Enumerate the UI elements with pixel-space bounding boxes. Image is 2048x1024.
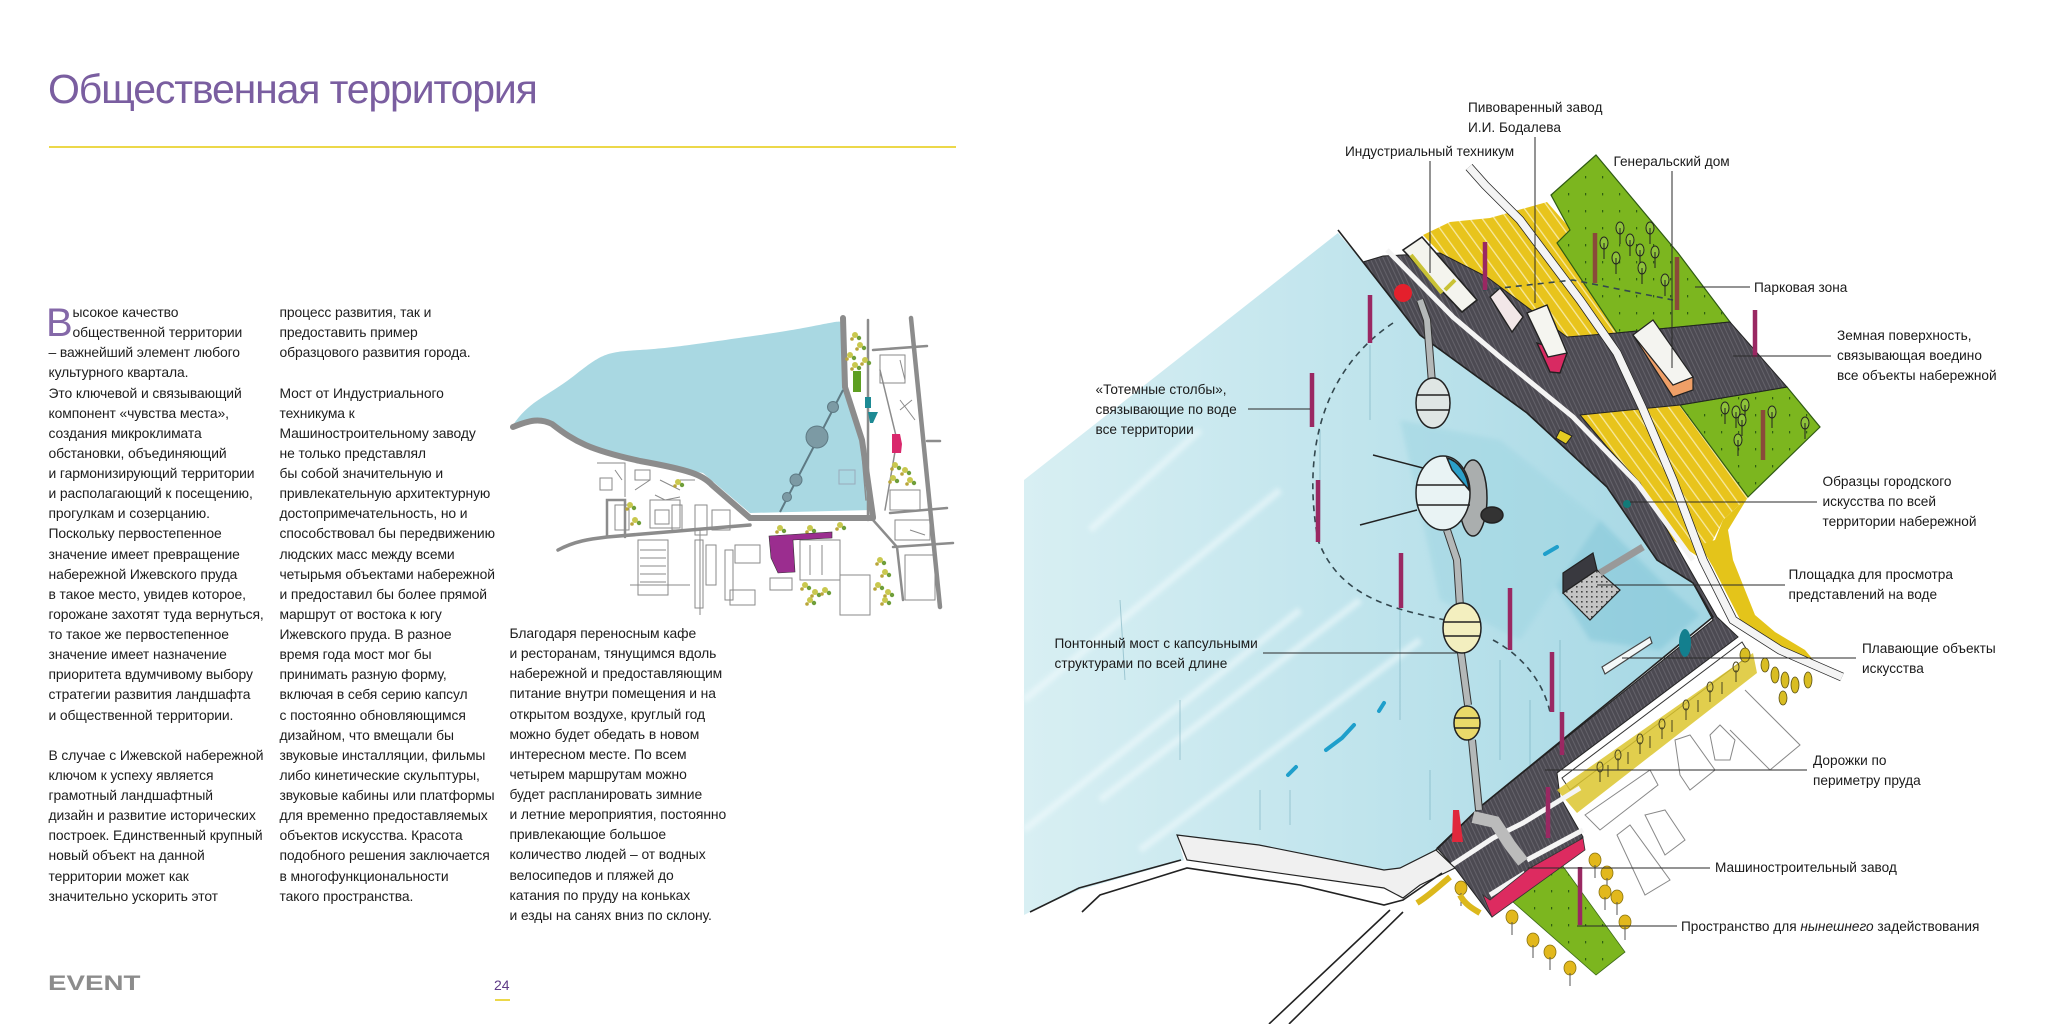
label: industrial college: Индустриальный техникум xyxy=(1345,144,1514,159)
sketch: capsule 1 xyxy=(1416,378,1450,428)
sketch: red dot xyxy=(1394,284,1412,302)
sketch: white embankment path xyxy=(1387,250,1693,560)
sketch: dark embankment surface xyxy=(1363,253,1787,917)
page number underline xyxy=(495,999,510,1001)
sketch: water streaks xyxy=(1024,345,1700,850)
logo EVENT: EVENT xyxy=(48,972,140,995)
label: pontoon bridge: структурами по всей длине xyxy=(1054,656,1227,671)
sketch: dashed route xyxy=(1313,280,1673,712)
label: urban art: Образцы городского xyxy=(1822,474,1952,489)
label: floating art: Плавающие объекты xyxy=(1862,641,1996,656)
sketch: pink factory bar xyxy=(1483,838,1585,917)
sketch: yellow trees south xyxy=(1455,853,1631,986)
plan: green strip xyxy=(853,371,861,392)
plan: roads xyxy=(513,318,953,607)
label: general house: Генеральский дом xyxy=(1614,154,1730,169)
plan: pond xyxy=(513,322,872,513)
label: current use space: Пространство для нынешнего задействования xyxy=(1681,919,1979,934)
label: brewery: И.И. Бодалева xyxy=(1468,120,1561,135)
text column 3: Благодаря переносным кафе и ресторанам, тянущимся вдоль набережной и предоставляющим питание внутри помещения и на открытом воздухе, круглый год можно будет обедать в новом интересном месте. По всем четырем маршрутам можно будет распланировать зимние и летние мероприятия, постоянно привлекающие большое количество людей – от водных велосипедов и пляжей до катания по пруду на коньках и езды на санях вниз по склону. xyxy=(510,625,726,923)
sketch: floating art xyxy=(1602,637,1652,674)
label: totem poles: «Тотемные столбы», xyxy=(1096,382,1227,397)
label: machine plant: Машиностроительный завод xyxy=(1715,860,1897,875)
sketch: building windows xyxy=(1411,255,1455,293)
label: perimeter paths: периметру пруда xyxy=(1813,773,1921,788)
plan: floating bridge xyxy=(780,390,855,512)
sketch: capsule 4 xyxy=(1454,706,1480,740)
sketch: yellow patch west xyxy=(1417,877,1480,913)
sketch: trees xyxy=(1600,222,1809,456)
text column 1: ысокое качество общественной территории – важнейший элемент любого культурного квартала. Это ключевой и связывающий компонент «чувства места», создания микроклимата обстановки, объединяющий и гармонизирующий территории и располагающий к посещению, прогулкам и созерцанию. Поскольку первостепенное значение имеет превращение набережной Ижевского пруда в такое место, увидев которое, горожане захотят туда вернуться, то такое же первостепенное значение имеет назначение приоритета вдумчивому выбору стратегии развития ландшафта и общественной территории. В случае с Ижевской набережной ключом к успеху является грамотный ландшафтный дизайн и развитие исторических построек. Единственный крупный новый объект на данной территории может как значительно ускорить этот xyxy=(48,304,264,904)
label: ground surface: все объекты набережной xyxy=(1837,368,1997,383)
plan: vegetation xyxy=(625,332,916,606)
label: ground surface: связывающая воедино xyxy=(1837,348,1982,363)
label: park zone: Парковая зона xyxy=(1754,280,1848,295)
label: urban art: территории набережной xyxy=(1822,514,1977,529)
label: ground surface: Земная поверхность, xyxy=(1837,328,1972,343)
sketch: poles xyxy=(1312,233,1763,925)
title underline xyxy=(49,146,956,148)
sketch: brewery buildings xyxy=(1490,288,1567,373)
label: viewing platform: представлений на воде xyxy=(1788,587,1937,602)
sketch: lower yellow strip xyxy=(1557,653,1757,813)
sketch: teal dot xyxy=(1623,500,1631,508)
sketch: red marker xyxy=(1452,810,1463,842)
main axonometric sketch xyxy=(1024,100,1997,1024)
label: pontoon bridge: Понтонный мост с капсульными xyxy=(1054,636,1258,651)
label: totem poles: связывающие по воде xyxy=(1096,402,1237,417)
text column 2: процесс развития, так и предоставить пример образцового развития города. Мост от Индустриального техникума к Машиностроительному заводу не только представлял бы собой значительную и привлекательную архитектурную достопримечательность, но и способствовал бы передвижению людских масс между всеми четырьмя объектами набережной и предоставил бы более прямой маршрут от востока к югу Ижевского пруда. В разное время года мост мог бы принимать разную форму, включая в себя серию капсул с постоянно обновляющимся дизайном, что вмещали бы звуковые инсталляции, фильмы либо кинетические скульптуры, звуковые кабины или платформы для временно предоставляемых объектов искусства. Красота подобного решения заключается в многофункциональности такого пространства. xyxy=(280,304,495,904)
sketch: upper yellow strips xyxy=(1423,202,1617,337)
sketch: solid yellow shore xyxy=(1700,497,1820,668)
plan: teal buildings xyxy=(865,397,878,423)
small site plan xyxy=(513,318,953,615)
label: perimeter paths: Дорожки по xyxy=(1813,753,1886,768)
label: brewery: Пивоваренный завод xyxy=(1468,100,1602,115)
sketch: big capsule xyxy=(1360,455,1503,536)
sketch: building technical school xyxy=(1403,237,1477,312)
leader lines xyxy=(1248,137,1856,926)
sketch: viewing platform xyxy=(1563,547,1643,620)
sketch: yellow art object xyxy=(1556,430,1572,444)
label: totem poles: все территории xyxy=(1096,422,1194,437)
sketch: shore lines and road south xyxy=(1030,860,1442,1024)
sketch: pond edge line xyxy=(1338,230,1713,850)
sketch: white buildings outlines xyxy=(1585,690,1800,895)
sketch: water xyxy=(1024,233,1713,915)
sketch: yellow tree cluster xyxy=(1740,648,1812,705)
plan: purple factory xyxy=(769,532,832,573)
sketch: tree row xyxy=(1597,662,1739,782)
page number: 24 xyxy=(494,977,510,993)
plan: pink building xyxy=(892,434,902,453)
sketch: south green xyxy=(1513,865,1625,975)
sketch: blue dashes xyxy=(1288,547,1557,775)
sketch: bridge landing xyxy=(1473,817,1523,862)
sketch: teal blob xyxy=(1679,629,1691,657)
sketch: white road xyxy=(1469,167,1842,677)
label: floating art: искусства xyxy=(1862,661,1924,676)
plan: thin building outlines xyxy=(597,355,935,615)
sketch: green zone south xyxy=(1680,387,1820,497)
sketch: capsule 3 xyxy=(1443,603,1481,653)
drop cap: В xyxy=(46,301,73,345)
label: urban art: искусства по всей xyxy=(1822,494,1936,509)
title: Общественная территория xyxy=(48,66,537,112)
label: viewing platform: Площадка для просмотра xyxy=(1788,567,1953,582)
sketch: general house xyxy=(1633,320,1693,397)
sketch: green park zone xyxy=(1551,155,1730,333)
sketch: lower path band xyxy=(1562,642,1750,790)
sketch: shoreline xyxy=(1177,835,1455,898)
sketch: white strips in block xyxy=(1452,788,1583,895)
sketch: pontoon bridge xyxy=(1420,300,1479,810)
